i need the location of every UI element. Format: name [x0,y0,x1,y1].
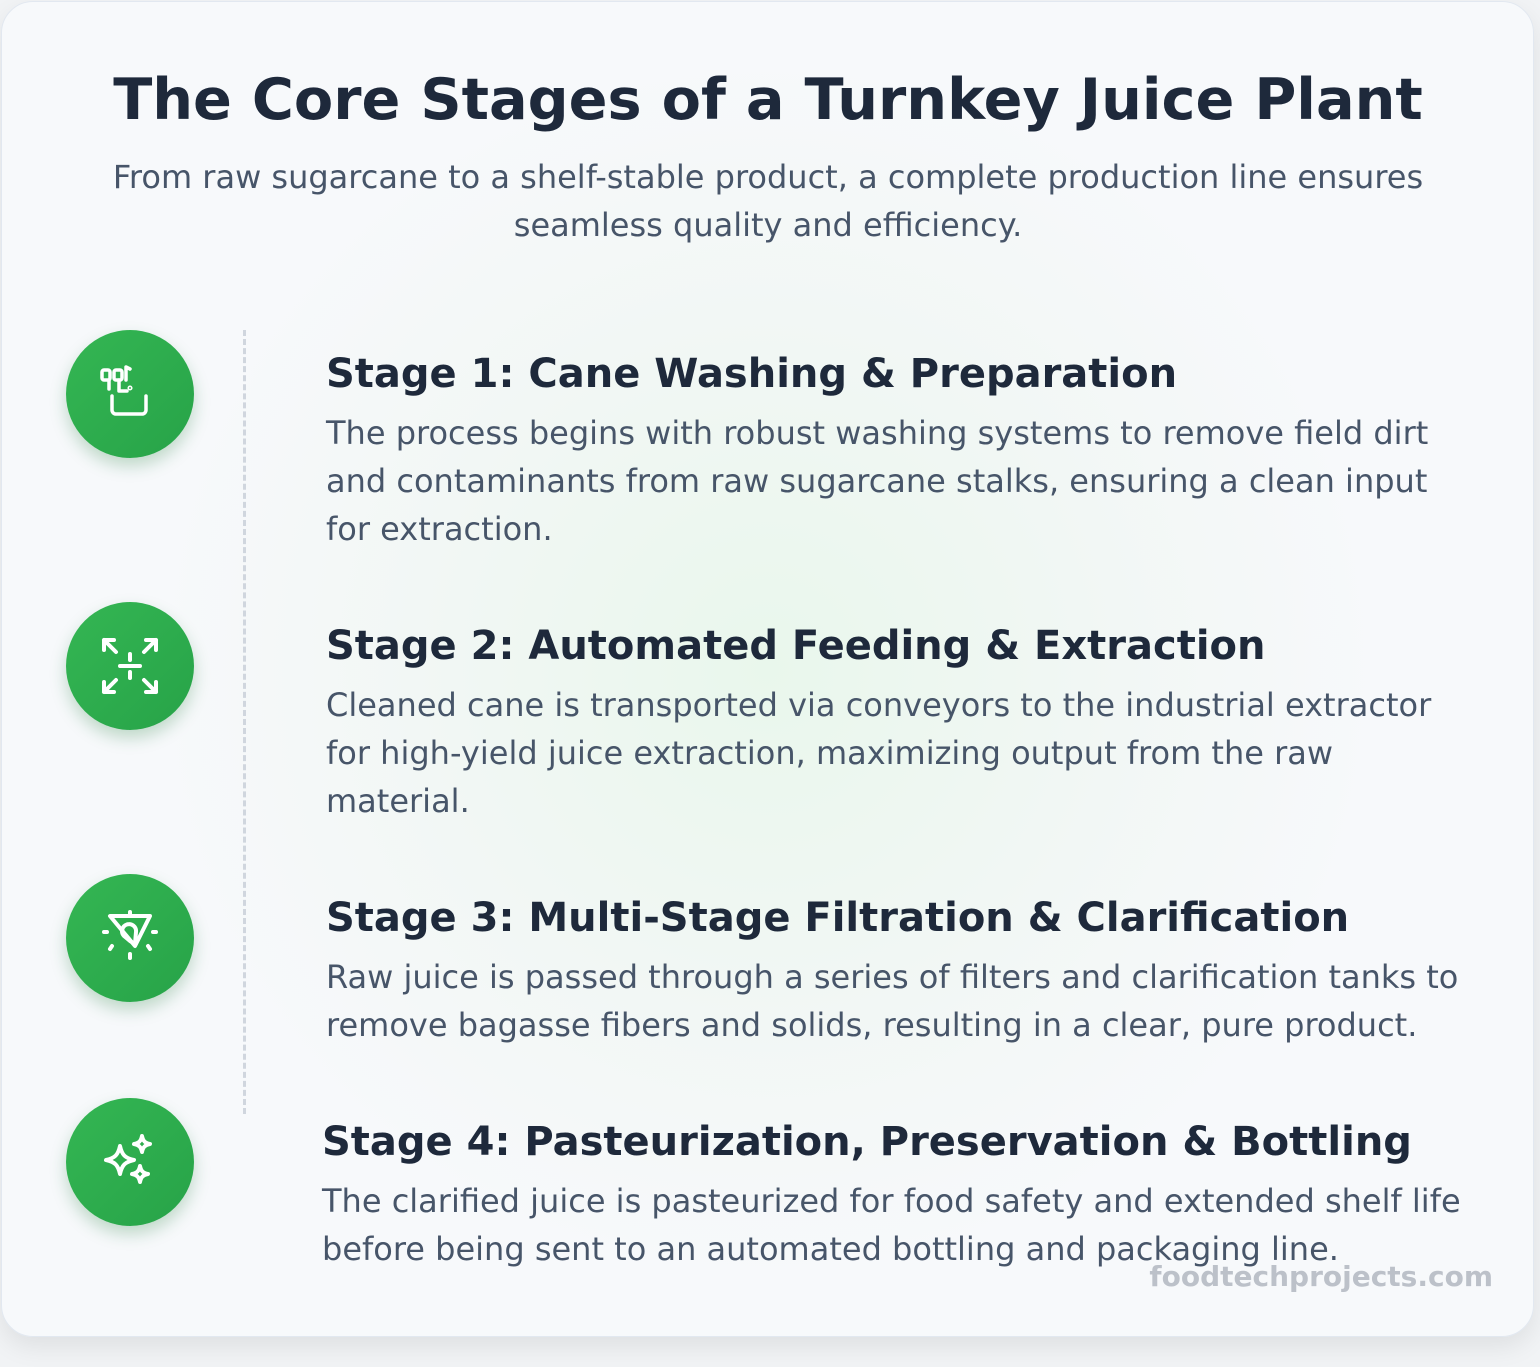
stage 3 heading: Stage 3: Multi-Stage Filtration & Clarification [326,895,1349,941]
watermark: foodtechprojects.com [1149,1260,1493,1293]
stage 4 text: The clarified juice is pasteurized for food safety and extended shelf life [322,1182,1461,1220]
stage 1 text: and contaminants from raw sugarcane stalks, ensuring a clean input [326,462,1427,500]
stage 3 text: Raw juice is passed through a series of filters and clarification tanks to [326,958,1458,996]
stage 2 text: Cleaned cane is transported via conveyors to the industrial extractor [326,686,1431,724]
stage 1 heading: Stage 1: Cane Washing & Preparation [326,351,1177,397]
icon: stage 4 sparkles [66,1098,194,1226]
stage 2 text: material. [326,782,470,820]
subtitle: From raw sugarcane to a shelf-stable product, a complete production line ensures [113,158,1423,196]
stage 1 text: for extraction. [326,510,553,548]
stage 1 text [326,414,1428,548]
stage 1 text: The process begins with robust washing systems to remove field dirt [326,414,1428,452]
subtitle: seamless quality and efficiency. [514,206,1022,244]
timeline dashed line [243,330,246,1114]
stage 2 heading: Stage 2: Automated Feeding & Extraction [326,623,1266,669]
title: The Core Stages of a Turnkey Juice Plant [113,66,1423,133]
icon: stage 3 filtration [66,874,194,1002]
subtitle [113,158,1423,244]
stage 4 heading: Stage 4: Pasteurization, Preservation & Bottling [322,1119,1412,1165]
icon: stage 1 washing [66,330,194,458]
stage 4 text [322,1182,1461,1268]
stage 3 text [326,958,1458,1044]
stage 2 text: for high-yield juice extraction, maximizing output from the raw [326,734,1333,772]
stage 3 text: remove bagasse fibers and solids, resulting in a clear, pure product. [326,1006,1417,1044]
stage 4 text: before being sent to an automated bottling and packaging line. [322,1230,1339,1268]
icon: stage 2 extraction [66,602,194,730]
stage 2 text [326,686,1432,820]
